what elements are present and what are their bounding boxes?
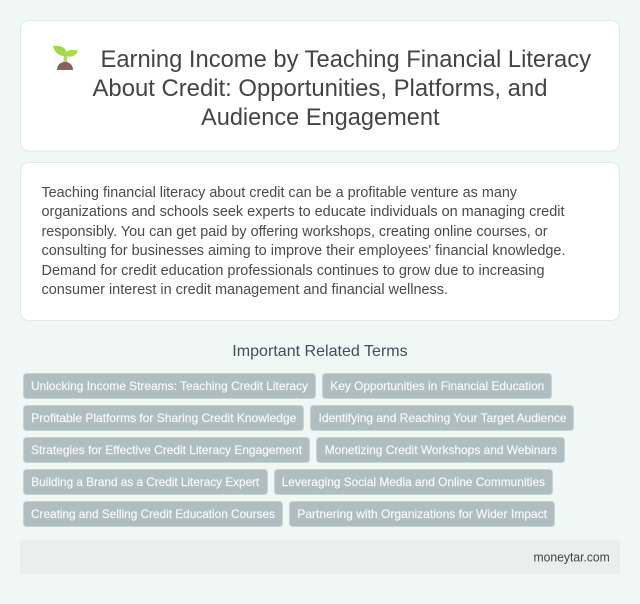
tag: building a brand: Building a Brand as a Credit Literacy Expert xyxy=(31,475,260,489)
tag: engagement strategies: Strategies for Effective Credit Literacy Engagement xyxy=(31,443,303,457)
description text xyxy=(42,185,566,298)
description text: organizations and schools seek experts to educate individuals on managing credit xyxy=(42,204,564,220)
description text: consumer interest in credit management and financial wellness. xyxy=(42,282,448,298)
description text: Demand for credit education professionals continues to grow due to increasing xyxy=(42,263,544,279)
footer: moneytar.com xyxy=(534,550,610,564)
tag: key opportunities xyxy=(322,374,552,398)
description text: consulting for businesses aiming to improve their employees' financial knowledge. xyxy=(42,243,566,259)
title: About Credit: Opportunities, Platforms, and xyxy=(92,75,548,102)
heading: important related terms: Important Related Terms xyxy=(232,343,408,360)
icon: sprout xyxy=(53,46,78,70)
description text: Teaching financial literacy about credit can be a profitable venture as many xyxy=(42,185,518,201)
tag: social media: Leveraging Social Media and Online Communities xyxy=(282,475,545,489)
description text: responsibly. You can get paid by offering workshops, creating online courses, or xyxy=(42,224,548,240)
panel: description card xyxy=(20,162,620,320)
tag: unlocking income streams: Unlocking Income Streams: Teaching Credit Literacy xyxy=(31,379,308,393)
panel: title card xyxy=(20,20,620,151)
tag: engagement strategies xyxy=(24,438,310,462)
tag: profitable platforms xyxy=(24,406,304,430)
footer xyxy=(20,540,620,574)
tag: unlocking income streams xyxy=(24,374,316,398)
title xyxy=(92,46,591,131)
tag: building a brand xyxy=(24,470,268,494)
tag: creating courses xyxy=(24,502,282,526)
tag: creating courses: Creating and Selling Credit Education Courses xyxy=(31,507,275,521)
tag: target audience xyxy=(310,406,574,430)
tag: social media xyxy=(274,470,552,494)
tag: monetizing workshops xyxy=(316,438,564,462)
tag: monetizing workshops: Monetizing Credit Workshops and Webinars xyxy=(325,443,557,457)
tag: partnering: Partnering with Organizations for Wider Impact xyxy=(297,507,548,521)
title: Audience Engagement xyxy=(201,104,440,131)
tag: partnering xyxy=(290,502,554,526)
tag list xyxy=(24,374,574,526)
title: Earning Income by Teaching Financial Literacy xyxy=(100,46,591,73)
tag: key opportunities: Key Opportunities in Financial Education xyxy=(330,379,544,393)
tag: target audience: Identifying and Reaching Your Target Audience xyxy=(318,411,567,425)
tag: profitable platforms: Profitable Platforms for Sharing Credit Knowledge xyxy=(31,411,297,425)
